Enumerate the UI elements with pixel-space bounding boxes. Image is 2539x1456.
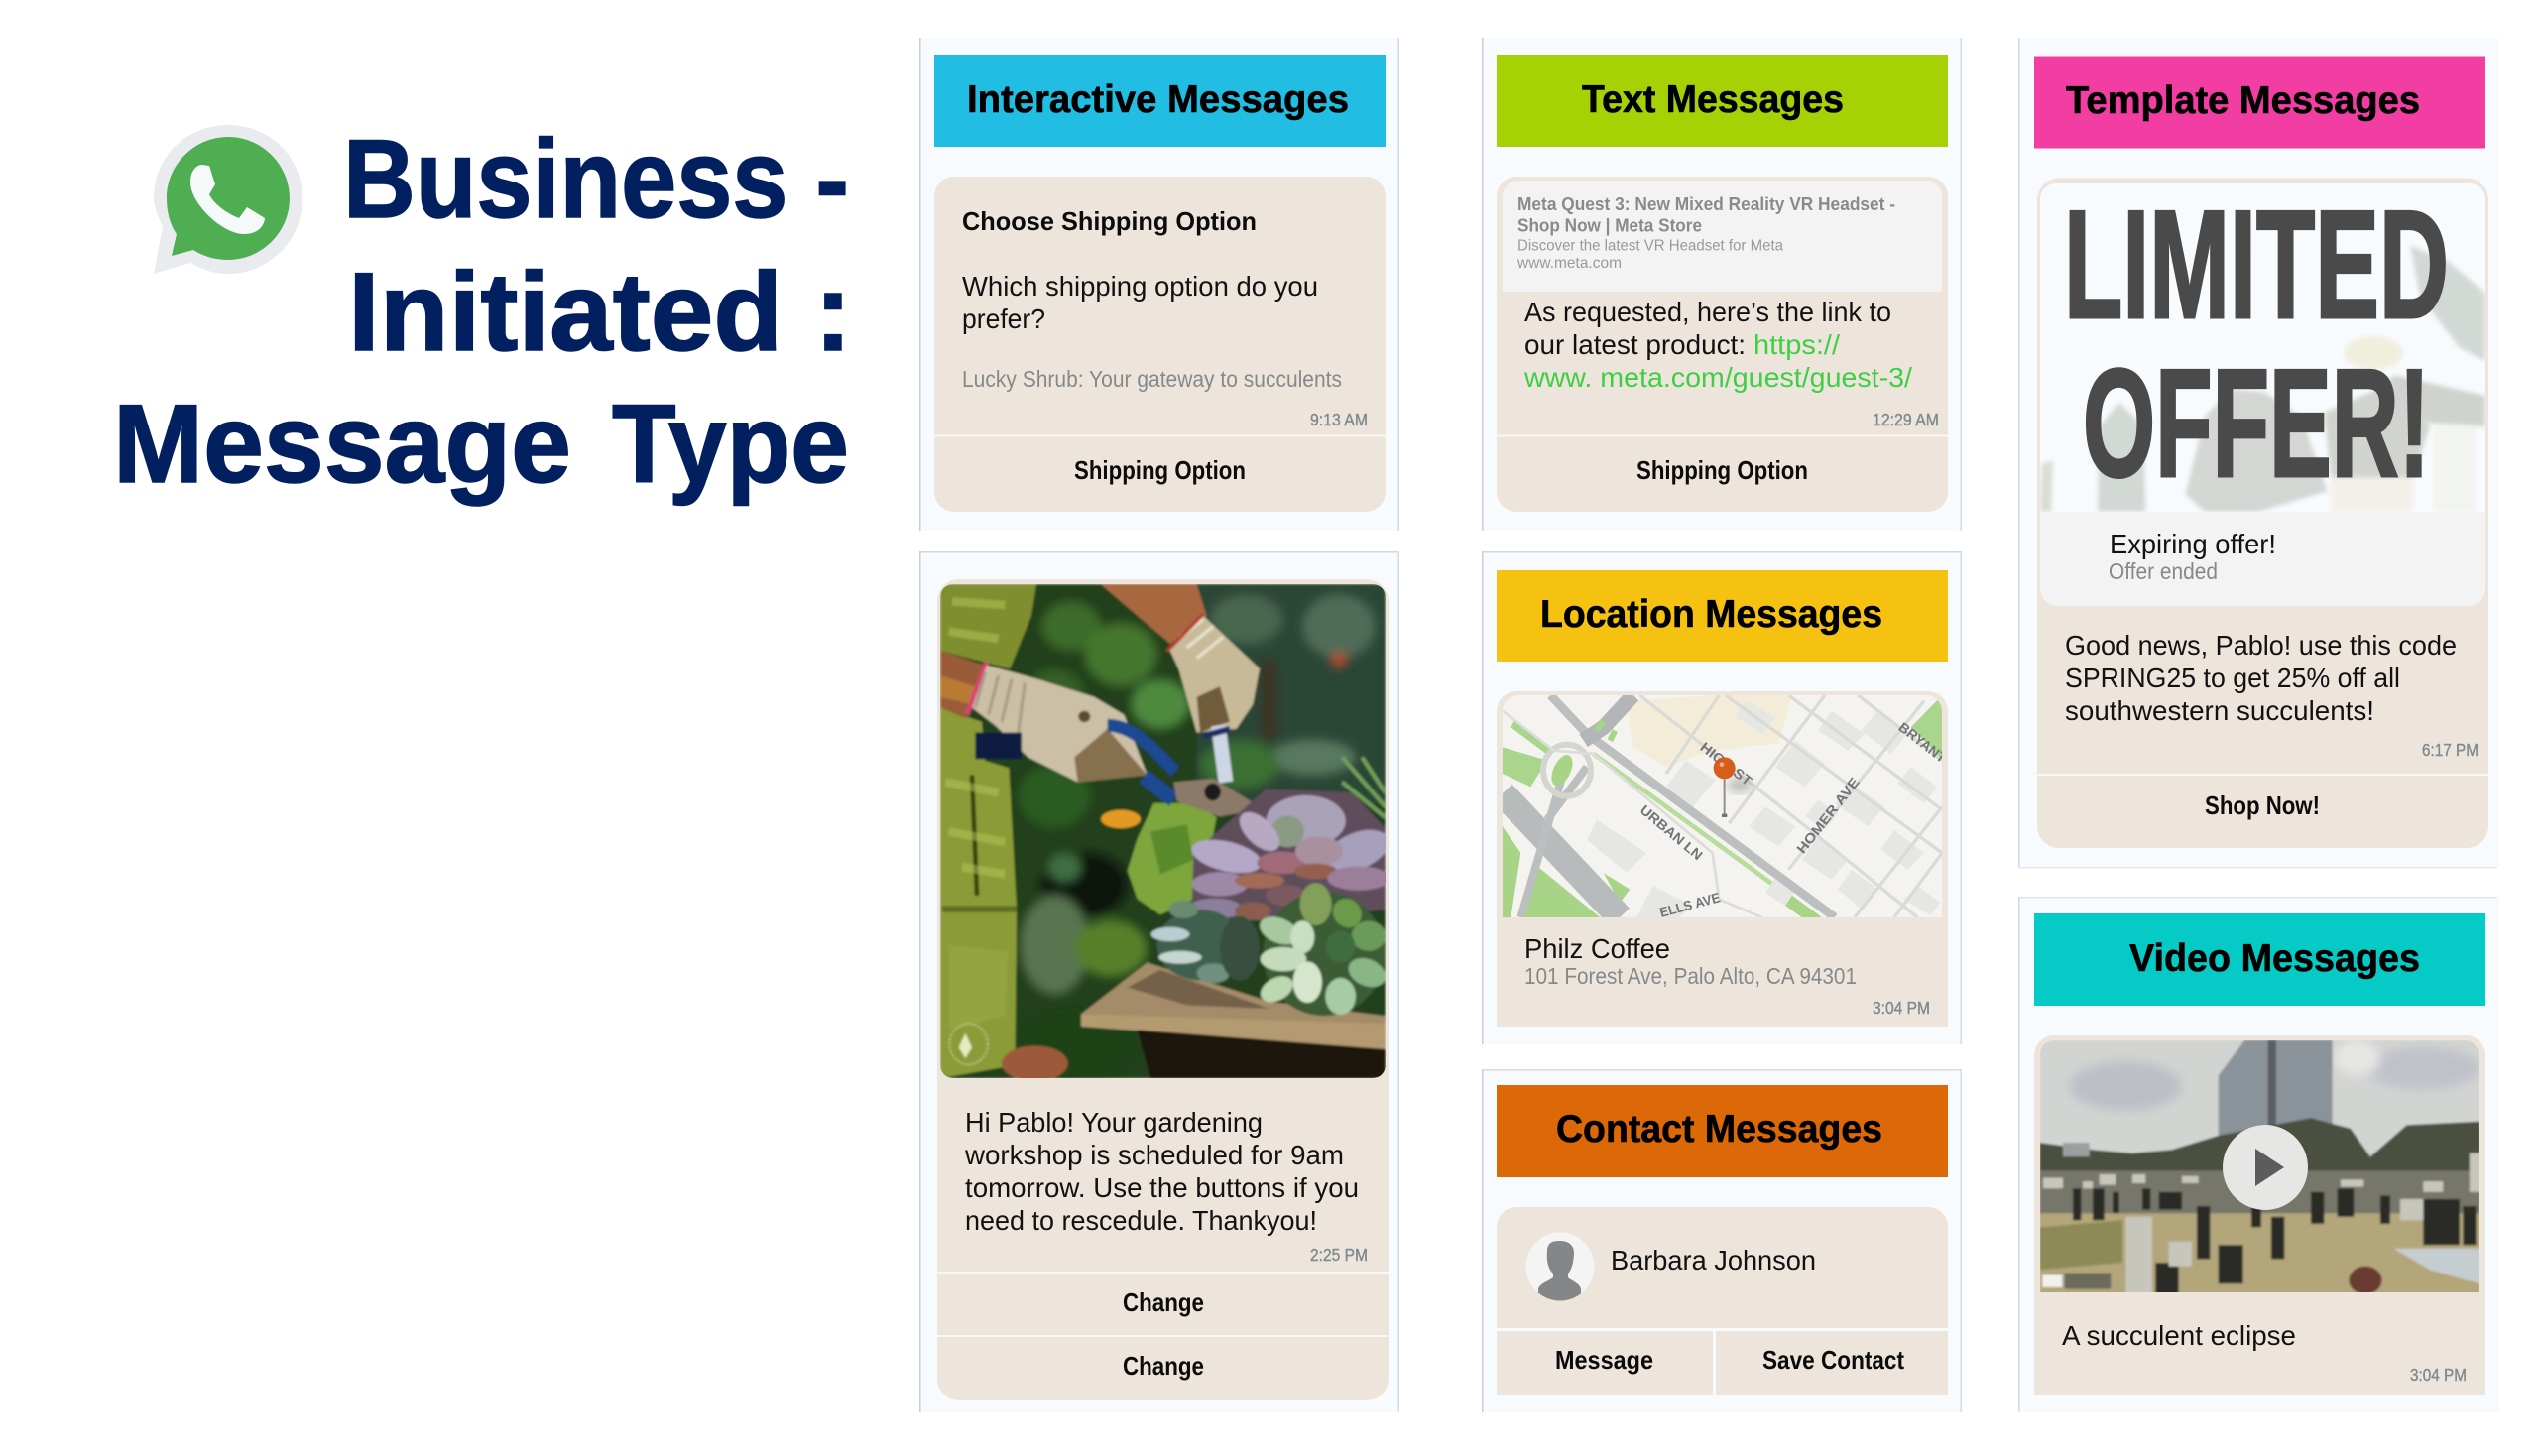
offer footer (2040, 512, 2485, 606)
faded plants (2040, 245, 2485, 512)
location details (1524, 933, 1930, 1018)
message bubble (2034, 1035, 2485, 1395)
message bubble (1497, 177, 1948, 512)
message text: need to rescedule. Thankyou! (965, 1205, 1317, 1236)
icon: WhatsApp logo (154, 125, 302, 274)
buttons (937, 1272, 1389, 1381)
button: message: Message (1555, 1345, 1653, 1375)
heading: interactive messages: Interactive Messages (967, 78, 1349, 121)
video thumbnail (2040, 1040, 2479, 1294)
heading: location messages (1497, 570, 1948, 662)
message bubble (937, 579, 1389, 1400)
panel: contact messages (1482, 1069, 1962, 1412)
button: save contact (1716, 1331, 1948, 1395)
video caption (2062, 1320, 2467, 1385)
message bubble (934, 177, 1386, 512)
map street labels (1637, 719, 1950, 920)
message text: tomorrow. Use the buttons if you (965, 1172, 1359, 1203)
map street labels: HIGH ST (1697, 739, 1755, 789)
map street labels: URBAN LN (1637, 801, 1706, 863)
map street labels: BRYANT (1895, 719, 1950, 766)
photo: gloved hands pruning succulents (940, 584, 1394, 1081)
video caption: A succulent eclipse (2062, 1320, 2296, 1351)
heading: template messages: Template Messages (2066, 79, 2420, 122)
buttons: Change (1123, 1351, 1204, 1381)
link preview: Shop Now | Meta Store (1517, 214, 1702, 236)
message text: workshop is scheduled for 9am (964, 1140, 1344, 1170)
map pin (1714, 757, 1752, 817)
message text: 6:17 PM (2422, 740, 2479, 760)
heading: contact messages: Contact Messages (1556, 1108, 1882, 1151)
message bubble: Choose Shipping Option (962, 206, 1257, 236)
panel: interactive messages (919, 38, 1399, 531)
message text (2065, 630, 2479, 760)
heading: text messages (1497, 55, 1948, 147)
heading: text messages: Text Messages (1582, 78, 1844, 121)
map street labels: HOMER AVE (1793, 775, 1863, 856)
button: message (1497, 1331, 1713, 1395)
title: Message (113, 382, 571, 506)
buttons: Change (1123, 1287, 1204, 1317)
message text: Good news, Pablo! use this code (2065, 630, 2457, 661)
message text: 2:25 PM (1310, 1245, 1368, 1265)
message text: Hi Pablo! Your gardening (965, 1107, 1263, 1138)
message bubble: Which shipping option do you (962, 271, 1318, 302)
location details: 101 Forest Ave, Palo Alto, CA 94301 (1524, 963, 1857, 989)
video caption: 3:04 PM (2410, 1365, 2467, 1385)
contact card: Barbara Johnson (1611, 1245, 1816, 1275)
message bubble: https:// (1753, 329, 1840, 360)
link preview: Meta Quest 3: New Mixed Reality VR Headset - (1517, 193, 1895, 214)
heading: location messages: Location Messages (1540, 593, 1882, 636)
message text (964, 1107, 1368, 1265)
message bubble: Lucky Shrub: Your gateway to succulents (962, 366, 1342, 392)
heading: contact messages (1497, 1085, 1948, 1177)
button: shop now: Shop Now! (2205, 790, 2320, 820)
message bubble: Shipping Option (1074, 455, 1246, 485)
button: save contact: Save Contact (1762, 1345, 1904, 1375)
panel: text messages (1482, 38, 1962, 531)
message text: SPRING25 to get 25% off all (2065, 663, 2400, 693)
location details: Philz Coffee (1524, 933, 1670, 964)
message bubble: prefer? (962, 303, 1045, 334)
message bubble (1497, 691, 1950, 1027)
heading: template messages (2034, 56, 2485, 149)
title: Business - (343, 117, 849, 241)
message text: southwestern succulents! (2065, 695, 2374, 726)
contact card (1497, 1207, 1948, 1328)
panel: template messages (2018, 38, 2499, 869)
limited offer banner (2040, 179, 2485, 512)
title: Initiated : (348, 250, 852, 374)
offer footer: Offer ended (2109, 558, 2218, 584)
icon: contact avatar (1525, 1232, 1595, 1307)
message bubble: our latest product: (1524, 329, 1746, 360)
message bubble (2037, 179, 2488, 848)
panel: image message (919, 551, 1399, 1412)
heading: interactive messages (934, 55, 1386, 147)
link preview (1503, 181, 1942, 292)
offer footer: Expiring offer! (2110, 529, 2276, 559)
heading: video messages: Video Messages (2129, 937, 2420, 980)
message bubble: Shipping Option (1636, 455, 1808, 485)
link preview: www.meta.com (1516, 255, 1622, 272)
title (113, 117, 852, 506)
message bubble: 12:29 AM (1873, 410, 1939, 429)
panel: location messages (1482, 551, 1962, 1044)
location details: 3:04 PM (1873, 998, 1930, 1018)
message bubble: As requested, here’s the link to (1524, 297, 1891, 327)
icon: play button (2223, 1125, 2308, 1210)
map (1503, 695, 1950, 920)
message bubble: www. meta.com/guest/guest-3/ (1523, 362, 1912, 393)
title: Type (612, 382, 849, 506)
map street labels: ELLS AVE (1658, 889, 1722, 920)
message bubble: 9:13 AM (1310, 410, 1368, 429)
panel: video messages (2018, 897, 2499, 1412)
heading: video messages (2034, 913, 2485, 1006)
link preview: Discover the latest VR Headset for Meta (1517, 238, 1783, 254)
